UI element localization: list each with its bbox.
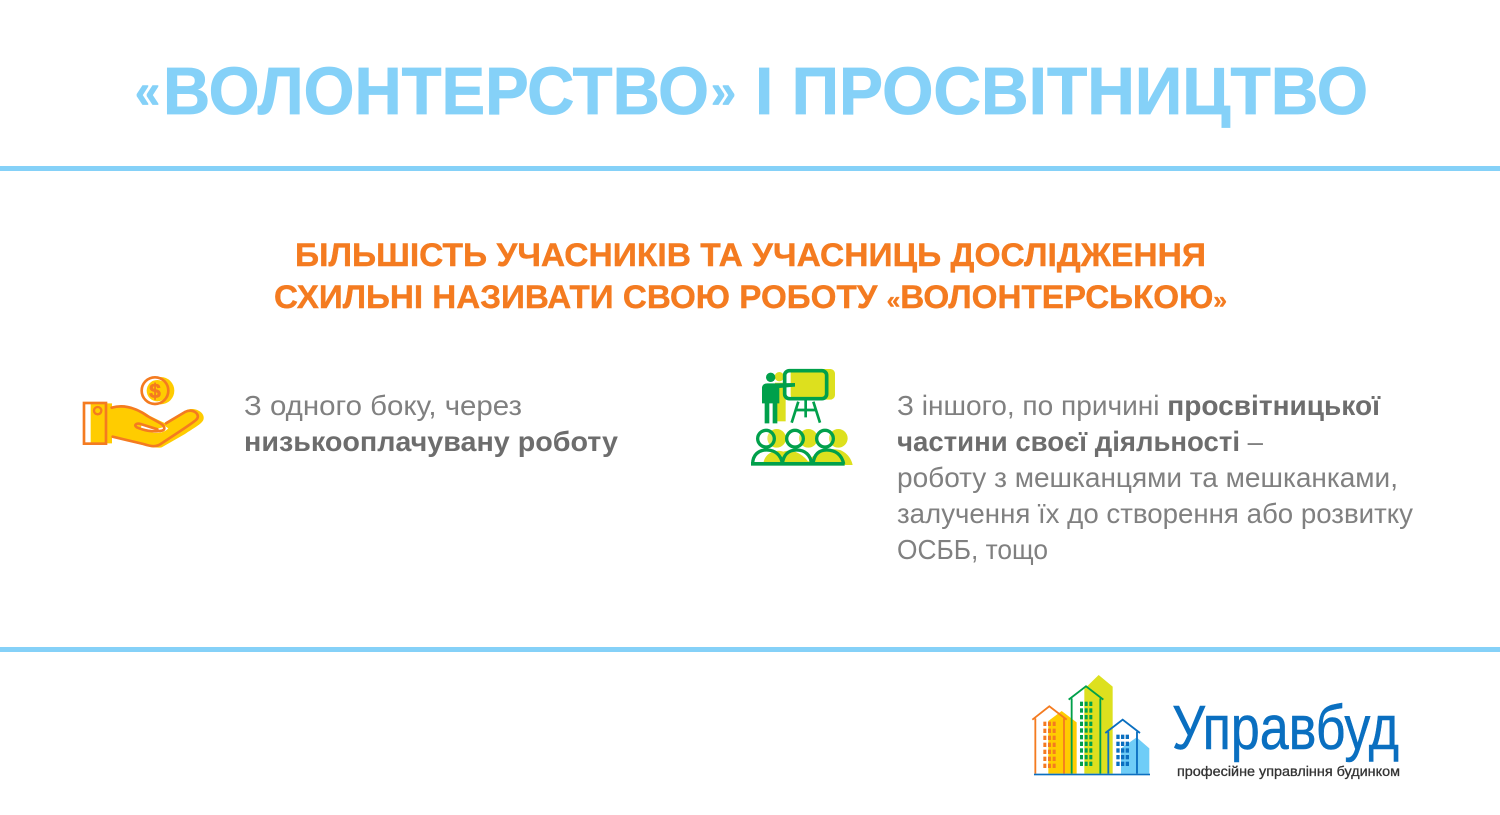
left text block: низькооплачувану роботу: [244, 426, 619, 457]
right text block: залучення їх до створення або розвитку: [897, 498, 1413, 529]
subheading: БІЛЬШІСТЬ УЧАСНИКІВ ТА УЧАСНИЦЬ ДОСЛІДЖЕННЯ: [295, 237, 1206, 273]
icon: hand with coin: [84, 377, 204, 448]
subheading: [274, 237, 1227, 315]
logo tagline: професійне управління будинком: [1177, 763, 1400, 779]
title: ВОЛОНТЕРСТВО: [163, 54, 709, 129]
title: І ПРОСВІТНИЦТВО: [755, 54, 1368, 129]
left text block: [244, 390, 619, 457]
right text block: роботу з мешканцями та мешканками,: [897, 462, 1398, 493]
logo: [1032, 675, 1400, 779]
windows: [1043, 722, 1056, 768]
title: «: [135, 66, 160, 119]
logo wordmark: Управбуд: [1172, 694, 1399, 763]
icon: presenter and audience: [751, 369, 853, 466]
right text block: З іншого, по причині просвітницької: [897, 390, 1381, 421]
title: [135, 54, 1368, 129]
subheading: СХИЛЬНІ НАЗИВАТИ СВОЮ РОБОТУ «ВОЛОНТЕРСЬКОЮ »: [274, 279, 1227, 315]
title: »: [711, 66, 736, 119]
left text block: З одного боку, через: [244, 390, 522, 421]
right text block: ОСББ, тощо: [897, 534, 1048, 565]
right text block: частини своєї діяльності –: [897, 426, 1264, 457]
right text block: [897, 390, 1413, 565]
logo icon: buildings: [1032, 675, 1150, 775]
dollar sign: $: [149, 380, 161, 403]
